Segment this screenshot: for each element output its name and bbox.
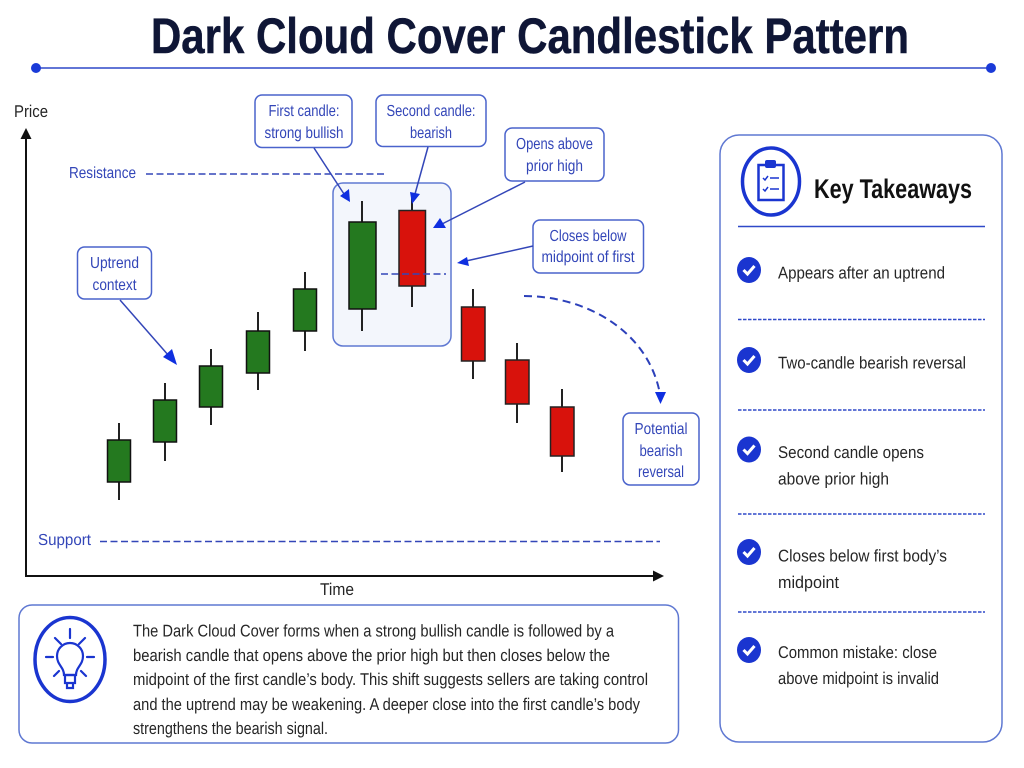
- chart: [14, 95, 699, 599]
- title rule: [31, 63, 996, 73]
- explanation text: strengthens the bearish signal.: [133, 719, 328, 738]
- takeaway 5: above midpoint is invalid: [778, 669, 939, 688]
- callout: uptrend context: [78, 247, 152, 299]
- callout: closes below midpoint: [533, 220, 644, 273]
- time axis: [25, 570, 664, 599]
- panel: key takeaways: [720, 135, 1002, 742]
- callout: first candle: [255, 95, 352, 148]
- explanation text: and the uptrend may be weakening. A deeper close into the first candle’s body: [133, 695, 640, 714]
- callout: first candle: strong bullish: [264, 125, 344, 142]
- uptrend candles: [108, 272, 316, 500]
- takeaway 3: above prior high: [778, 470, 889, 488]
- icon: clipboard: [742, 148, 800, 215]
- takeaway 1: [737, 257, 945, 283]
- explanation text: bearish candle that opens above the prior high but then closes below the: [133, 646, 610, 665]
- takeaway 4: [737, 539, 947, 592]
- icon: light bulb: [35, 618, 105, 702]
- downtrend candles: [462, 289, 574, 472]
- callout: opens above prior high: [505, 128, 604, 181]
- callout: potential bearish reversal: bearish: [640, 443, 682, 460]
- arrow: closes below midpoint: [457, 246, 533, 266]
- panel: explanation: [19, 605, 678, 743]
- arrow: uptrend context: [120, 300, 177, 365]
- takeaway 3: [737, 436, 924, 488]
- takeaway 3: Second candle opens: [778, 443, 924, 462]
- callout: closes below midpoint: Closes below: [550, 228, 627, 245]
- explanation text: The Dark Cloud Cover forms when a strong bullish candle is followed by a: [133, 622, 614, 640]
- takeaway 2: [737, 347, 966, 373]
- arrow: first candle: [314, 148, 350, 202]
- support level: Support: [38, 532, 92, 549]
- curved arrow: potential reversal: [524, 296, 666, 404]
- second candle of pattern: [399, 196, 426, 307]
- callout: uptrend context: context: [92, 277, 137, 294]
- arrow: opens above prior high: [433, 182, 525, 228]
- callout: second candle: bearish: [410, 125, 452, 142]
- callout: uptrend context: Uptrend: [90, 255, 139, 272]
- explanation text: midpoint of the first candle’s body. This shift suggests sellers are taking control: [133, 670, 648, 689]
- takeaway 1: Appears after an uptrend: [778, 264, 945, 282]
- arrow: second candle: [410, 147, 428, 204]
- heading: key takeaways: Key Takeaways: [814, 174, 972, 204]
- callout: first candle: First candle:: [268, 103, 340, 120]
- callout: opens above prior high: Opens above: [516, 136, 593, 153]
- highlight box: pattern candles: [333, 183, 451, 346]
- takeaway 5: Common mistake: close: [778, 643, 937, 662]
- takeaway 5: [737, 637, 939, 688]
- callout: second candle: [376, 95, 486, 146]
- takeaway 4: Closes below first body’s: [778, 546, 947, 566]
- callout: potential bearish reversal: reversal: [638, 464, 684, 481]
- takeaway 4: midpoint: [778, 573, 839, 592]
- time axis: Time: [320, 580, 354, 599]
- first candle of pattern: [349, 201, 376, 331]
- midpoint dashed line: [381, 273, 446, 275]
- callout: potential bearish reversal: [623, 413, 699, 485]
- explanation text: [133, 622, 648, 738]
- callout: second candle: Second candle:: [386, 103, 476, 120]
- takeaway 2: Two-candle bearish reversal: [778, 354, 966, 372]
- resistance level: Resistance: [69, 165, 136, 182]
- price axis: [14, 102, 48, 577]
- callout: potential bearish reversal: Potential: [634, 421, 688, 438]
- price axis: Price: [14, 102, 48, 121]
- callout: opens above prior high: prior high: [526, 158, 583, 175]
- callout: closes below midpoint: midpoint of first: [542, 249, 635, 266]
